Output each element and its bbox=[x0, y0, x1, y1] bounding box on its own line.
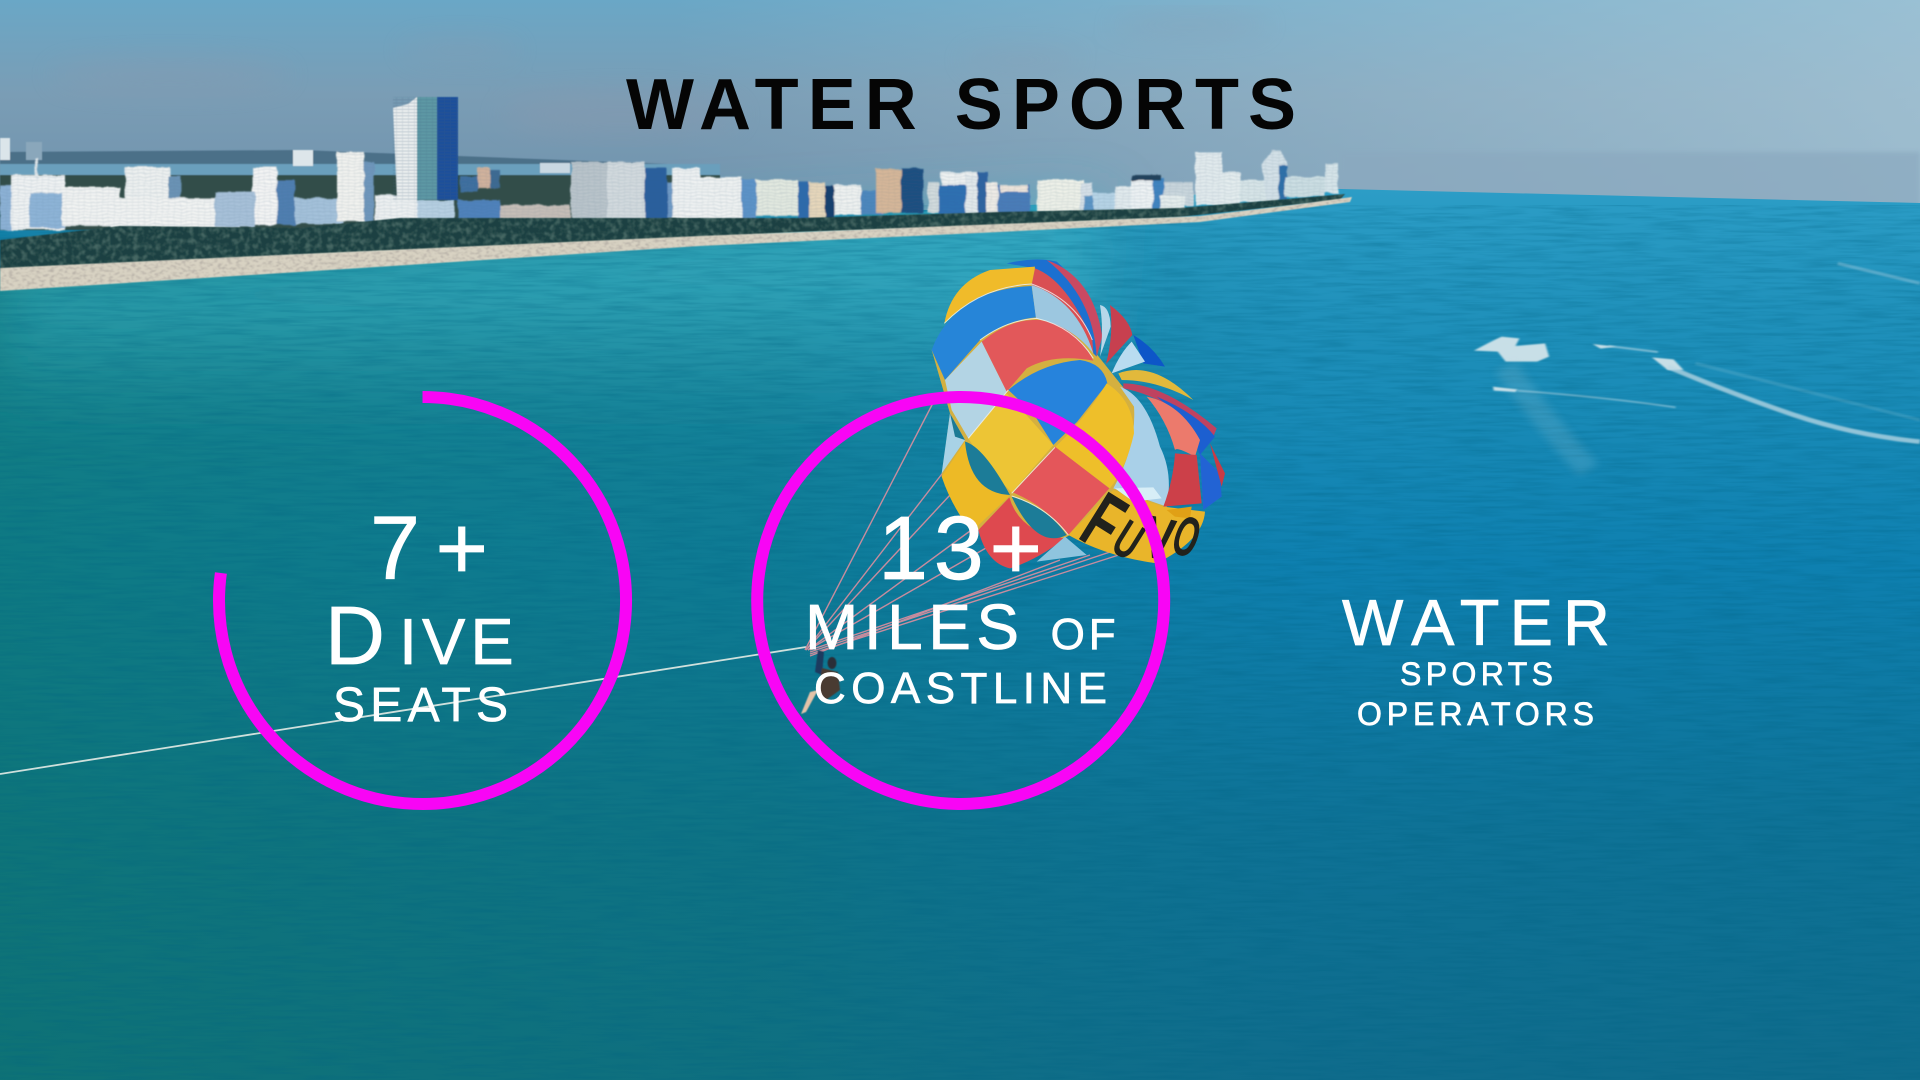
number: 13+: 13+ bbox=[878, 499, 1042, 599]
canopy lettering: F bbox=[1067, 476, 1140, 569]
stat: water sports operators bbox=[1342, 586, 1610, 732]
buildings bbox=[0, 150, 1340, 235]
boat wakes bbox=[1474, 263, 1920, 470]
label: operators: OPERATORS bbox=[1357, 696, 1594, 732]
background: sky bbox=[0, 0, 1920, 210]
stat: dive seats bbox=[325, 499, 519, 732]
tow rope bbox=[0, 647, 806, 774]
stat: miles of coastline bbox=[805, 499, 1120, 713]
progress ring: miles of coastline bbox=[757, 397, 1164, 804]
label: coastline: COASTLINE bbox=[814, 664, 1107, 713]
tall tower bbox=[393, 97, 458, 200]
label: miles of: MILES OF bbox=[805, 591, 1120, 663]
title: WATER SPORTS bbox=[626, 65, 1296, 145]
label: seats: SEATS bbox=[333, 679, 508, 732]
label: sports: SPORTS bbox=[1400, 656, 1553, 692]
label: water: WATER bbox=[1342, 586, 1610, 659]
parasail rider bbox=[801, 650, 840, 714]
beach bbox=[0, 190, 1360, 295]
parasail lines bbox=[805, 403, 1125, 656]
progress ring: dive seats bbox=[219, 397, 626, 804]
canopy lettering bbox=[1067, 476, 1209, 575]
canopy lettering: U bbox=[1102, 509, 1153, 572]
canopy lettering: O bbox=[1164, 503, 1209, 571]
canopy lettering: V bbox=[1138, 504, 1180, 575]
skyline and beach bbox=[0, 97, 1360, 295]
parasail canopy bbox=[932, 260, 1225, 575]
label: Dive: DIVE bbox=[325, 589, 519, 682]
number: 7+: 7+ bbox=[370, 499, 488, 599]
trees bbox=[0, 194, 1346, 270]
